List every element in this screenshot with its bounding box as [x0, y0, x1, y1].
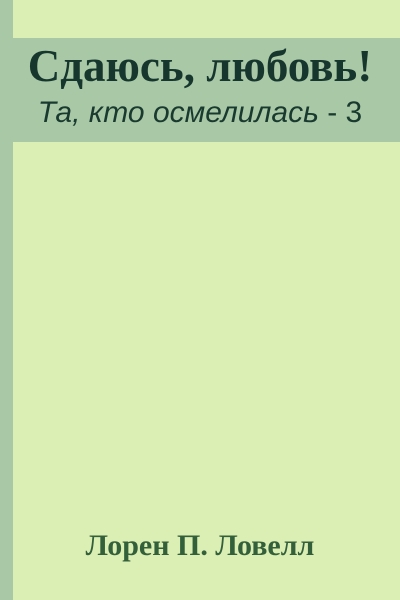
author name: Лорен П. Ловелл	[86, 529, 314, 562]
subtitle: Та, кто осмелилась - 3	[38, 96, 362, 128]
left sidebar stripe	[0, 0, 12, 600]
title band	[12, 38, 400, 142]
title: Сдаюсь, любовь!	[28, 40, 372, 90]
